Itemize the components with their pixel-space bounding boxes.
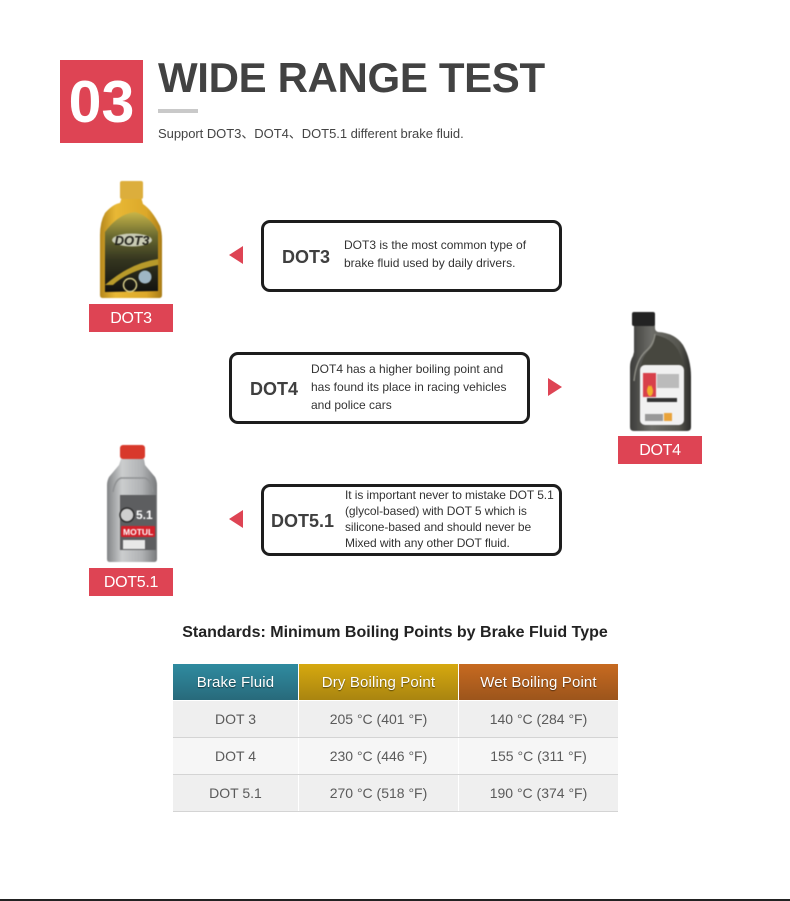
DOT4 description	[311, 362, 506, 412]
icon: DOT5.1 bottle	[106, 444, 158, 563]
DOT4 description: and police cars	[311, 398, 392, 412]
DOT5.1 description: It is important never to mistake DOT 5.1	[345, 488, 554, 502]
label: DOT3: DOT3	[110, 310, 152, 327]
panel: DOT5.1	[261, 484, 562, 556]
icon: DOT5.1 bottle: MOTUL	[123, 527, 153, 537]
DOT3 name: DOT3	[282, 247, 330, 267]
panel: DOT4	[229, 352, 530, 424]
header: Wet Boiling Point: Wet Boiling Point	[480, 674, 597, 691]
DOT3 description: DOT3 is the most common type of	[344, 238, 526, 252]
subtitle: Support DOT3、DOT4、DOT5.1 different brake fluid.	[158, 126, 464, 141]
panel: DOT3	[261, 220, 562, 292]
row: DOT 5.1: 190 °C (374 °F)	[490, 785, 587, 801]
label: DOT5.1	[89, 568, 173, 596]
row: DOT 5.1: DOT 5.1	[209, 785, 262, 801]
header: Brake Fluid	[173, 664, 298, 700]
row: DOT 4: 155 °C (311 °F)	[490, 748, 587, 764]
row: DOT 5.1: 270 °C (518 °F)	[330, 785, 427, 801]
DOT3 description: brake fluid used by daily drivers.	[344, 256, 515, 270]
DOT5.1 description: (glycol-based) with DOT 5 which is	[345, 504, 527, 518]
DOT3 description	[344, 238, 526, 270]
header: Dry Boiling Point: Dry Boiling Point	[322, 674, 435, 691]
row: DOT 4: DOT 4	[215, 748, 256, 764]
header: Wet Boiling Point	[459, 664, 618, 700]
icon: DOT3 bottle: DOT3	[115, 233, 150, 248]
table heading: Standards: Minimum Boiling Points by Brake Fluid Type	[182, 624, 608, 641]
DOT5.1 description: Mixed with any other DOT fluid.	[345, 536, 510, 550]
label: DOT4: DOT4	[639, 442, 681, 459]
DOT4 name: DOT4	[250, 379, 298, 399]
row: DOT 3: 205 °C (401 °F)	[330, 711, 427, 727]
DOT4 description: DOT4 has a higher boiling point and	[311, 362, 503, 376]
row: DOT 4	[173, 738, 618, 775]
arrow: DOT4	[548, 378, 562, 396]
icon: DOT3 bottle	[99, 180, 163, 299]
header: Brake Fluid: Brake Fluid	[197, 674, 274, 691]
DOT4 description: has found its place in racing vehicles	[311, 380, 506, 394]
label: DOT3	[89, 304, 173, 332]
title: WIDE RANGE TEST	[158, 54, 545, 101]
DOT5.1 name: DOT5.1	[271, 511, 334, 531]
DOT5.1 description	[345, 488, 554, 550]
title underline	[158, 109, 198, 113]
row: DOT 4: 230 °C (446 °F)	[330, 748, 427, 764]
icon: DOT4 bottle	[629, 311, 692, 432]
arrow: DOT3	[229, 246, 243, 264]
table	[173, 664, 618, 812]
row: DOT 5.1	[173, 775, 618, 812]
row: DOT 3: 140 °C (284 °F)	[490, 711, 587, 727]
header: Dry Boiling Point	[299, 664, 458, 700]
row: DOT 3: DOT 3	[215, 711, 256, 727]
label: DOT4	[618, 436, 702, 464]
icon: DOT5.1 bottle: 5.1	[136, 508, 153, 522]
label: DOT5.1: DOT5.1	[104, 574, 158, 591]
DOT5.1 description: silicone-based and should never be	[345, 520, 531, 534]
bottom rule	[0, 899, 790, 901]
number badge: 03	[69, 69, 134, 135]
number badge	[60, 60, 143, 143]
row: DOT 3	[173, 701, 618, 738]
bottle label text	[112, 234, 152, 246]
arrow: DOT5.1	[229, 510, 243, 528]
